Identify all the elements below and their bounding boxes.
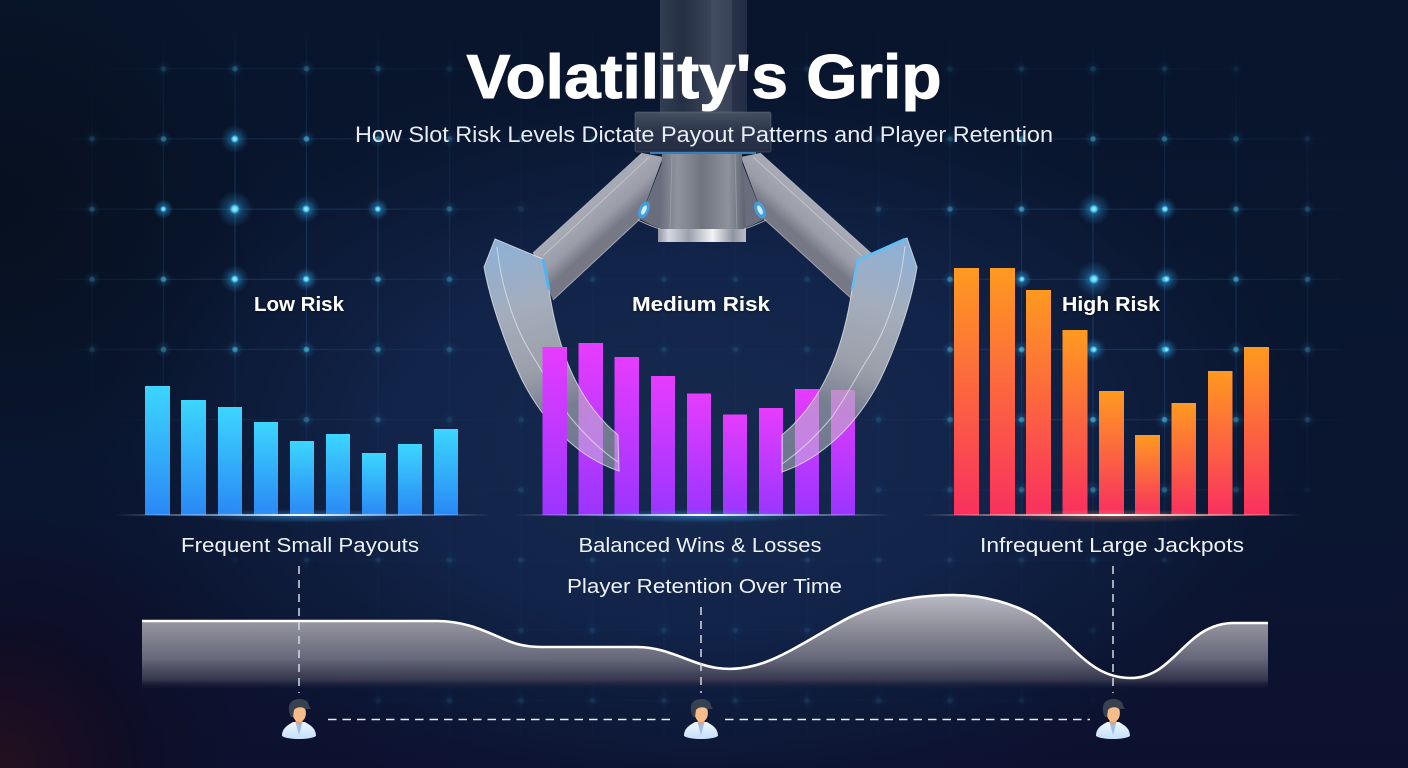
panel: low risk bbox=[115, 293, 491, 557]
bar chart: low risk bbox=[145, 386, 458, 515]
baseline: medium risk bbox=[515, 509, 891, 523]
claw: right finger bbox=[782, 238, 917, 472]
bar chart: medium risk bbox=[542, 343, 855, 515]
icon: player medium risk bbox=[684, 699, 718, 739]
icon: claw right joint light bbox=[752, 200, 768, 220]
icon: claw left joint light bbox=[636, 200, 652, 220]
connector: high risk to player bbox=[1112, 566, 1114, 693]
icon: player low risk bbox=[282, 699, 316, 739]
caption: low risk: Frequent Small Payouts bbox=[181, 535, 419, 557]
bar chart: high risk bbox=[954, 268, 1269, 515]
icon: player high risk bbox=[1096, 699, 1130, 739]
connector: medium risk to player bbox=[700, 607, 702, 693]
claw: column and ring bbox=[635, 0, 771, 154]
connector: player timeline left bbox=[328, 718, 673, 720]
claw: right arm bbox=[741, 153, 872, 300]
connector: player timeline right bbox=[725, 718, 1090, 720]
connector: low risk to player bbox=[298, 566, 300, 693]
title: Volatility's Grip bbox=[466, 43, 942, 112]
heading: low risk: Low Risk bbox=[254, 293, 345, 316]
subtitle: How Slot Risk Levels Dictate Payout Patterns and Player Retention bbox=[355, 122, 1053, 147]
caption: medium risk: Balanced Wins & Losses bbox=[578, 535, 822, 557]
panel: high risk bbox=[923, 268, 1301, 557]
panel: medium risk bbox=[515, 293, 891, 557]
heading: high risk: High Risk bbox=[1062, 293, 1161, 316]
claw: left finger bbox=[484, 239, 619, 471]
claw: hub bbox=[638, 154, 766, 242]
heading: player retention: Player Retention Over Time bbox=[567, 576, 842, 598]
baseline: low risk bbox=[115, 509, 491, 523]
baseline: high risk bbox=[923, 509, 1301, 523]
caption: high risk: Infrequent Large Jackpots bbox=[980, 535, 1244, 557]
heading: medium risk: Medium Risk bbox=[632, 293, 771, 316]
area chart: player retention bbox=[142, 595, 1268, 689]
claw: left arm bbox=[533, 153, 663, 300]
